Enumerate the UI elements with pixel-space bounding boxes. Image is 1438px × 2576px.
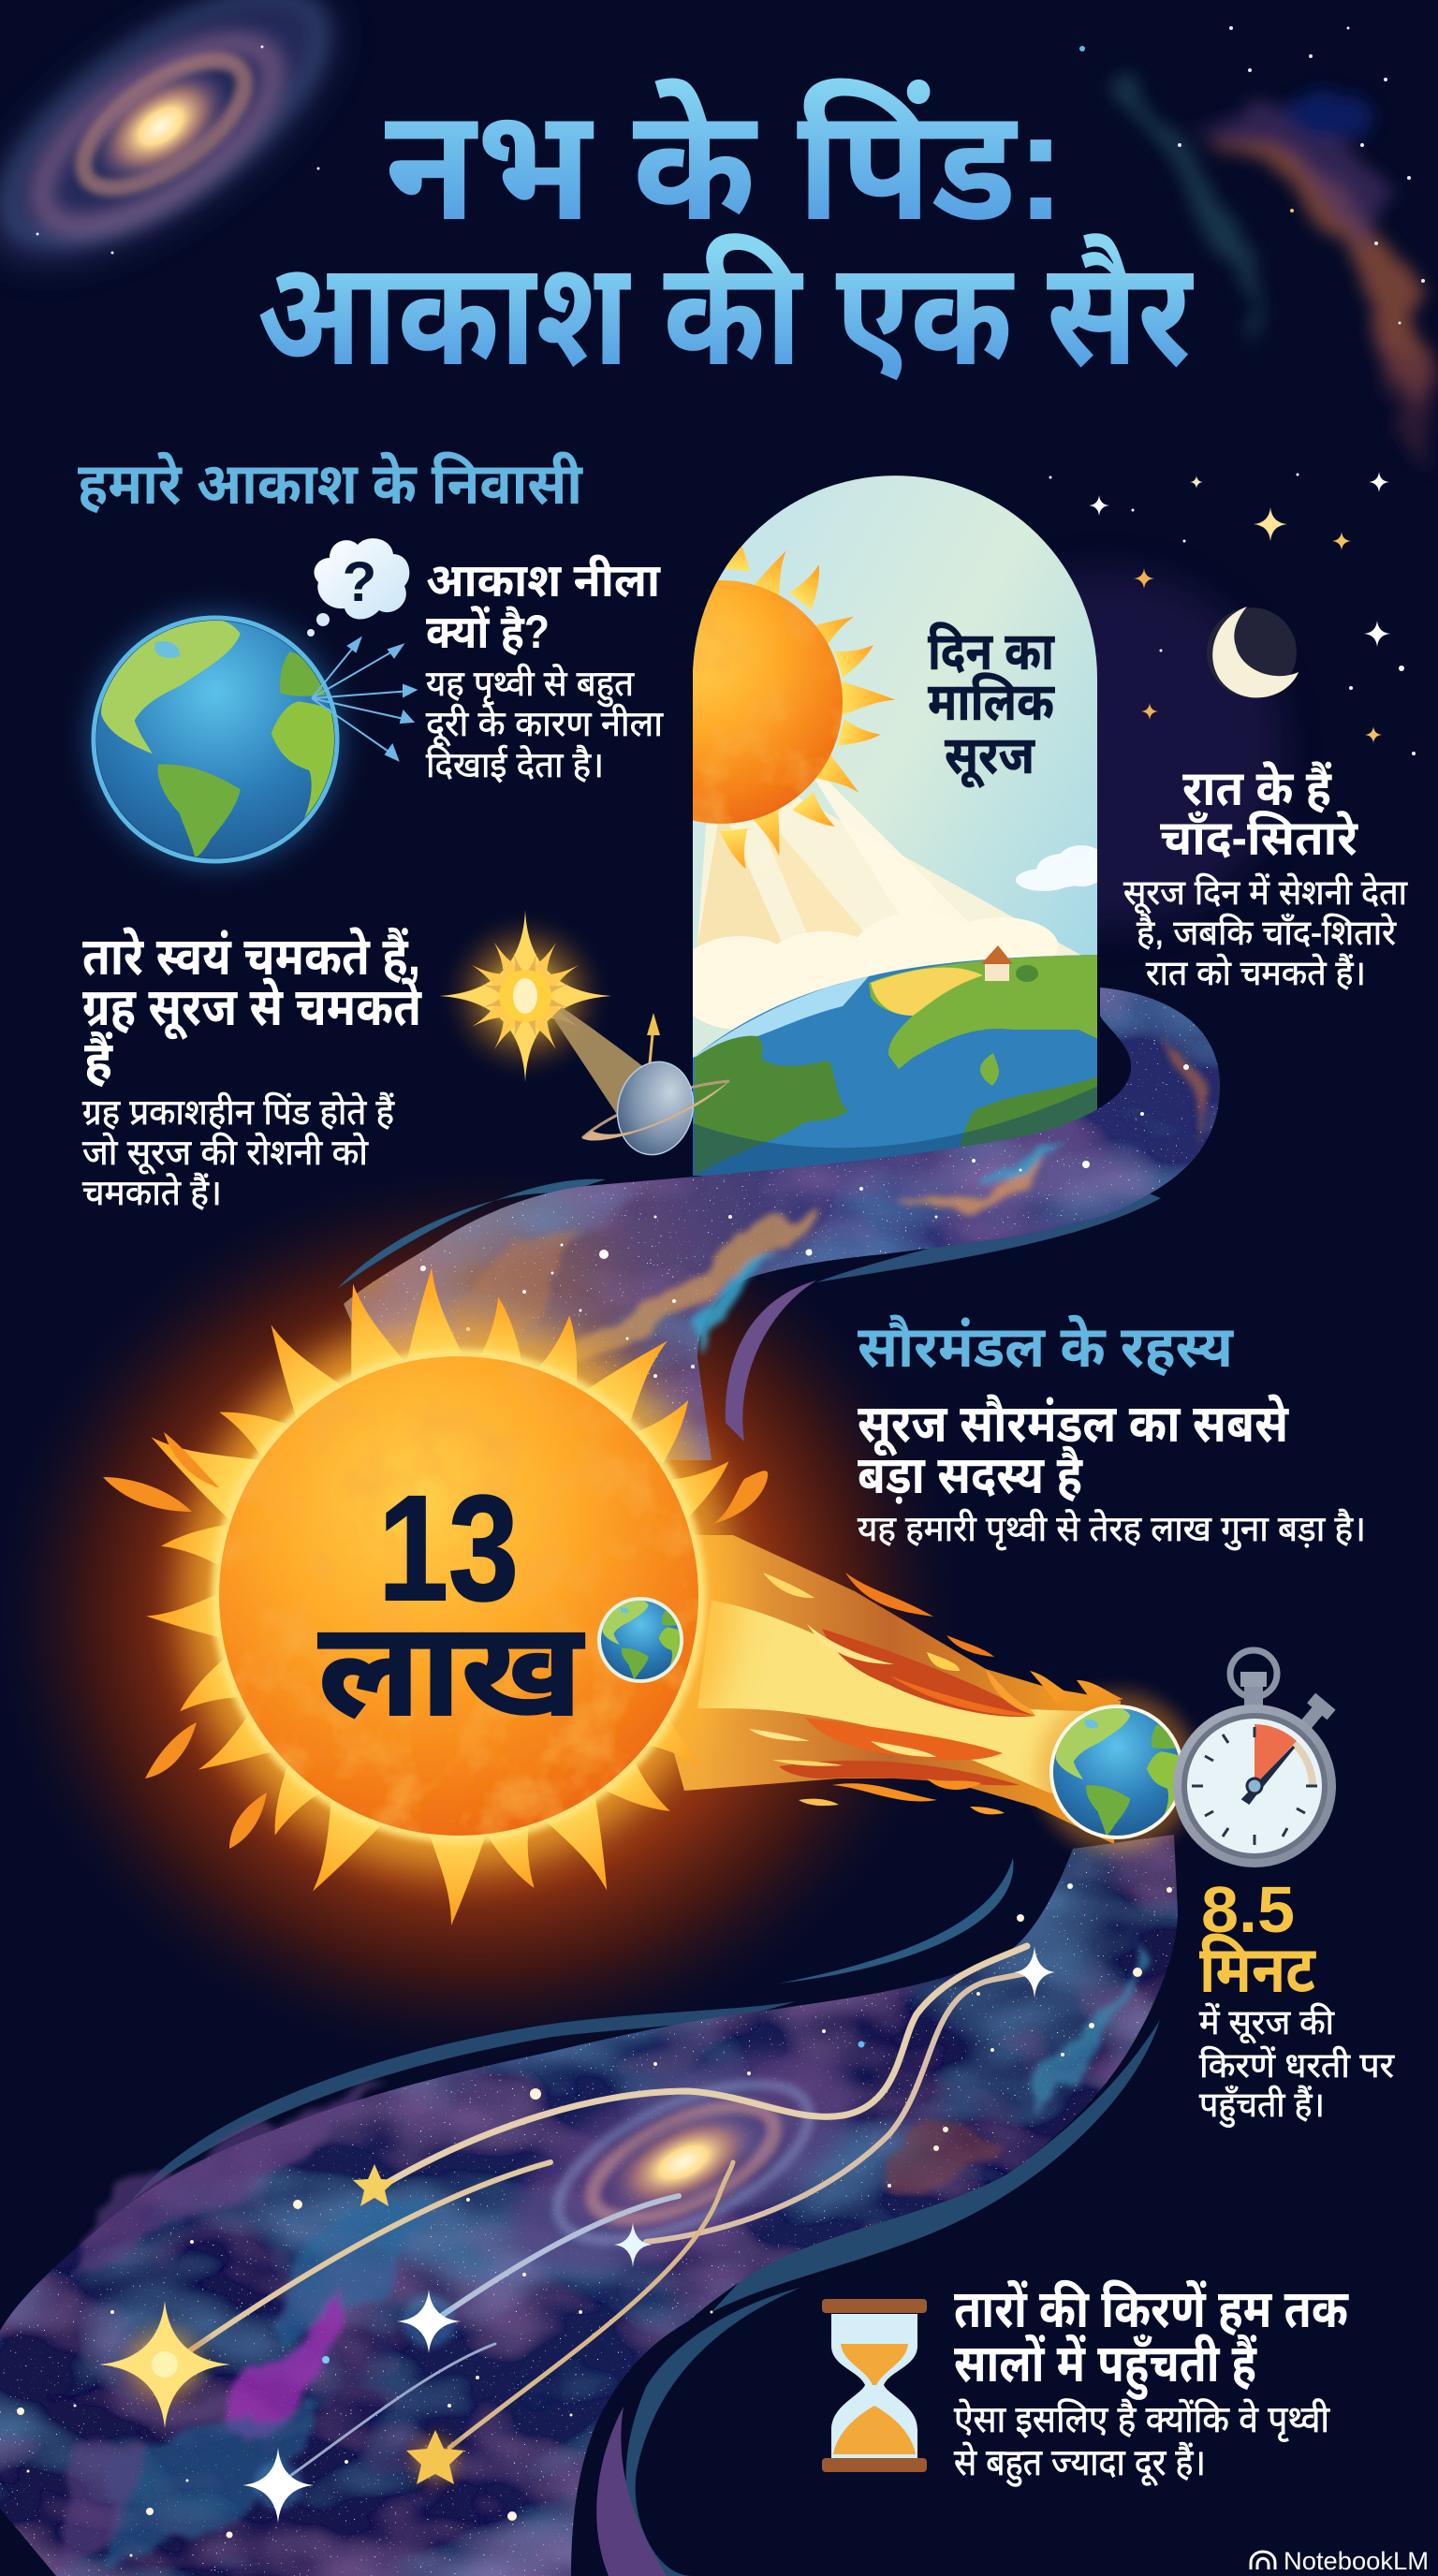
text: 8.5 minutes: किरणें धरती पर: [1199, 2045, 1395, 2085]
text: 8.5 minutes: 8.5: [1201, 1873, 1295, 1946]
icon: sun in arch: [693, 546, 895, 869]
text: 8.5 minutes: [1199, 1873, 1395, 2128]
icon: stopwatch: [1173, 1650, 1336, 1867]
solar flame to earth: [655, 1535, 1123, 1844]
icon: small earth on sun: [597, 1597, 683, 1683]
lower nebula colours: [56, 1938, 1137, 2569]
icon: giant sun: [103, 1265, 768, 1925]
river stars: [420, 1064, 1189, 1378]
text: moon and stars of the night: रात के हैं: [1182, 761, 1332, 816]
night sky stars and moon: [927, 472, 1416, 927]
text: stars shine themselves: ग्रह प्रकाशहीन पिंड होते हैं: [82, 1091, 395, 1133]
icon: thought cloud with question mark: ?: [343, 550, 376, 613]
earth horizon: [693, 945, 1098, 1189]
text: stars shine themselves: [82, 927, 422, 1213]
text: starlight takes years: [954, 2279, 1349, 2487]
river nebula streaks: [449, 1030, 1204, 1376]
text: lord of the day sun: मालिक: [928, 672, 1055, 731]
icon: crescent moon: [1207, 607, 1299, 697]
title: [257, 77, 1195, 396]
icon: earth at end of flame: [1036, 1691, 1197, 1852]
lower river stars: [17, 1883, 1172, 2557]
text: starlight takes years: तारों की किरणें हम तक: [954, 2279, 1349, 2338]
panel: day arch with sun and earth: [693, 476, 1097, 1176]
title: नभ के पिंड:: [385, 77, 1065, 253]
text: moon and stars of the night: है, जबकि चाँद-शितारे: [1137, 913, 1397, 952]
text: 8.5 minutes: में सूरज की: [1199, 2002, 1335, 2043]
text: why is the sky blue: यह पृथ्वी से बहुत: [426, 663, 635, 708]
stat: 13 lakh: 13: [378, 1464, 519, 1632]
galaxy in river: [478, 2007, 888, 2318]
planet: [582, 1055, 729, 1162]
cosmic river: lower: [0, 1835, 1178, 2576]
text: lord of the day sun: [928, 622, 1055, 788]
heading: residents of our sky: हमारे आकाश के निवासी: [78, 450, 584, 517]
title: आकाश की एक सैर: [257, 233, 1195, 396]
stat: 13 lakh: लाख: [318, 1596, 584, 1743]
text: moon and stars of the night: रात को चमकते हैं।: [1146, 953, 1366, 992]
text: lord of the day sun: सूरज: [945, 725, 1035, 788]
cloud band: [674, 845, 1108, 1030]
text: starlight takes years: सालों में पहुँचती हैं: [954, 2334, 1257, 2400]
text: sun is biggest member: सूरज सौरमंडल का सबसे: [858, 1394, 1289, 1456]
nebula: top right: [1114, 84, 1438, 468]
text: starlight takes years: ऐसा इसलिए है क्योंकि वे पृथ्वी: [954, 2399, 1330, 2441]
text: moon and stars of the night: सूरज दिन में सेशनी देता: [1123, 872, 1408, 914]
icon: star lighting a ringed planet: [436, 907, 729, 1162]
icon: hourglass: [822, 2299, 927, 2472]
text: 8.5 minutes: मिनट: [1199, 1933, 1316, 2006]
heading: solar system secrets: सौरमंडल के रहस्य: [858, 1313, 1235, 1380]
text: moon and stars of the night: चाँद-सितारे: [1160, 811, 1358, 866]
text: 8.5 minutes: पहुँचती हैं।: [1199, 2085, 1325, 2128]
text: sun is biggest member: यह हमारी पृथ्वी से तेरह लाख गुना बड़ा है।: [858, 1508, 1366, 1550]
text: why is the sky blue: आकाश नीला: [426, 554, 661, 607]
text: why is the sky blue: दूरी के कारण नीला: [426, 703, 664, 747]
icon: thought cloud with question mark: [307, 538, 409, 637]
trail stars: [99, 1946, 1055, 2523]
text: sun is biggest member: [858, 1394, 1366, 1550]
cosmic river: upper: [337, 988, 1220, 1460]
text: lord of the day sun: दिन का: [928, 622, 1055, 681]
sun rays: [697, 778, 1081, 957]
watermark: NotebookLM: NotebookLM: [1284, 2547, 1429, 2575]
text: stars shine themselves: तारे स्वयं चमकते हैं,: [82, 927, 420, 986]
text: sun is biggest member: बड़ा सदस्य है: [858, 1445, 1083, 1504]
text: stars shine themselves: जो सूरज की रोशनी को: [82, 1132, 369, 1175]
text: stars shine themselves: ग्रह सूरज से चमकते: [82, 977, 422, 1040]
icon: earth with scattered blue light: [58, 582, 416, 897]
stars: top scatter: [36, 26, 1425, 324]
text: why is the sky blue: दिखाई देता है।: [426, 744, 604, 785]
text: stars shine themselves: चमकाते हैं।: [82, 1172, 222, 1213]
star trails: [178, 1946, 1032, 2476]
big sun background glow: [0, 1156, 974, 2073]
galaxy: top left: [0, 0, 374, 311]
house: [981, 945, 1038, 982]
text: starlight takes years: से बहुत ज्यादा दूर हैं।: [954, 2442, 1206, 2487]
text: why is the sky blue: [426, 554, 664, 785]
text: stars shine themselves: हैं: [84, 1031, 113, 1090]
stat: 13 lakh: [318, 1464, 584, 1743]
text: why is the sky blue: क्यों है?: [426, 606, 550, 658]
text: moon and stars of the night: [1123, 761, 1408, 992]
